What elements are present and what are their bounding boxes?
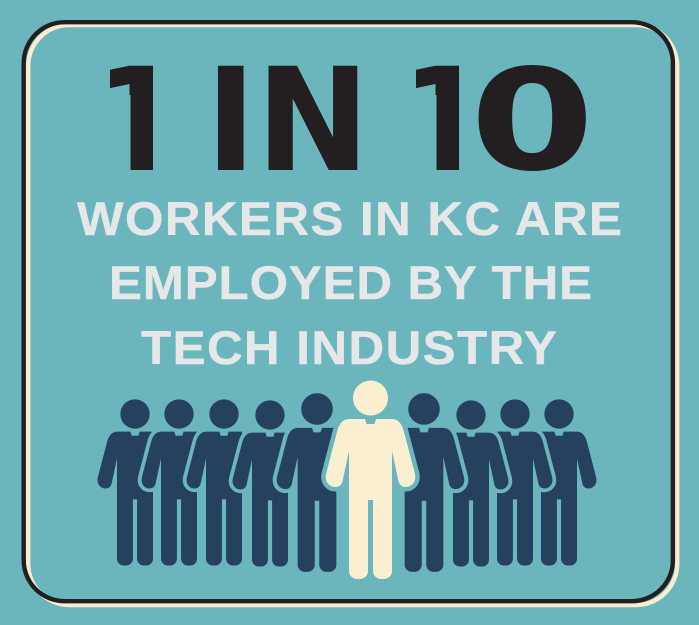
title: 1 in 10	[110, 65, 586, 171]
icon: navy worker 3	[187, 399, 242, 565]
text block: workers in KC are employed by the tech industry: EMPLOYED BY THE	[109, 257, 592, 310]
icon: navy worker 4	[233, 400, 288, 566]
icon: navy worker 5	[277, 393, 336, 572]
icon: highlighted cream worker	[326, 380, 415, 579]
icon: navy worker 8	[453, 400, 508, 566]
icon: navy worker 1	[98, 399, 153, 565]
text block: workers in KC are employed by the tech industry: TECH INDUSTRY	[141, 322, 557, 375]
icon: navy worker 2	[142, 399, 197, 565]
title: 1 in 10: 0	[470, 39, 594, 202]
text block: workers in KC are employed by the tech industry	[77, 193, 622, 375]
icon: navy worker 10	[541, 399, 596, 565]
title: 1 in 10: IN	[206, 38, 370, 204]
title: 1 in 10: 1	[89, 37, 188, 204]
icon: navy worker 7	[405, 393, 464, 572]
people group: ten workers, one highlighted	[98, 380, 596, 579]
title: 1 in 10: 1	[395, 37, 494, 204]
text block: workers in KC are employed by the tech industry: WORKERS IN KC ARE	[77, 193, 622, 246]
icon: navy worker 9	[497, 399, 552, 565]
